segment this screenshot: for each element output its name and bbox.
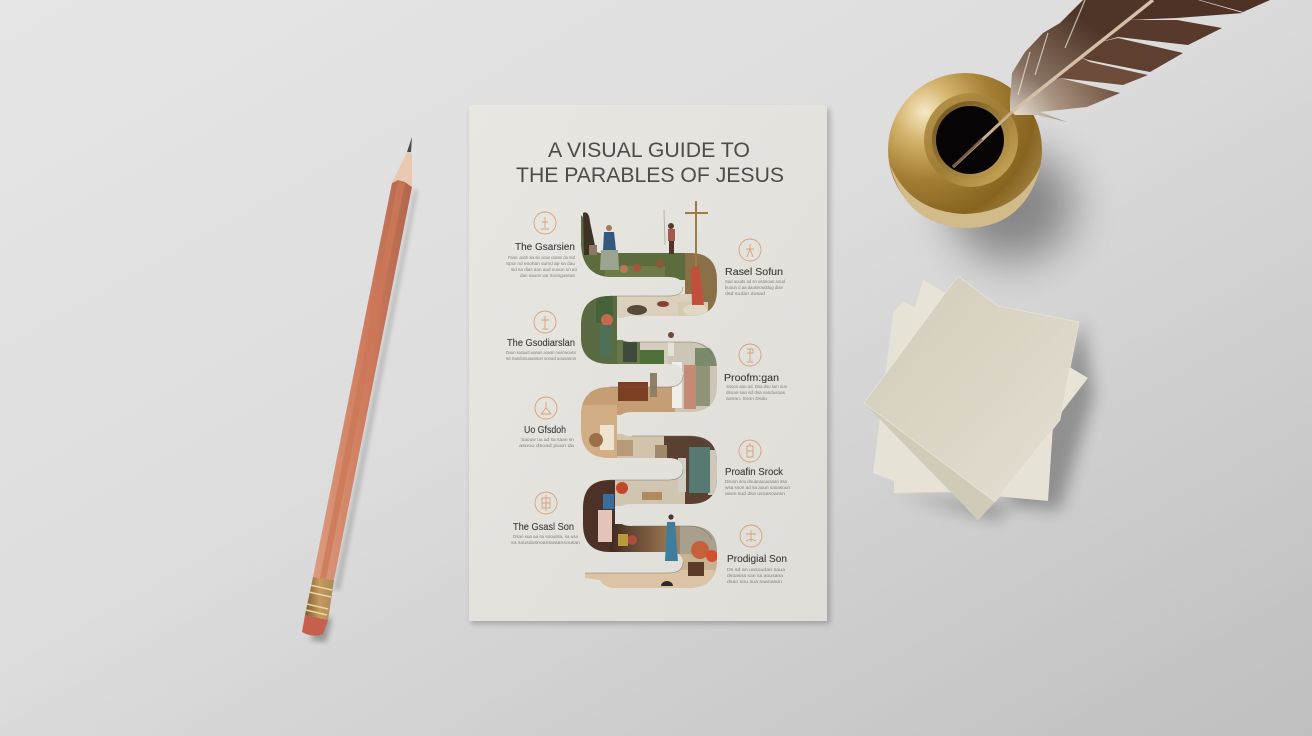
item: Prodigial Son: Ds sd an uasoudan saua xyxy=(727,567,786,572)
icon: figure xyxy=(739,440,761,462)
item: Rasel Sofun: Rasel Sofun xyxy=(725,266,783,278)
standing figures above the path xyxy=(583,201,708,561)
stack of paper notes xyxy=(864,276,1094,520)
icon: figure xyxy=(535,397,557,419)
item: The Gsasl Son: Dsan sua aa sa sooudsa, sa usa xyxy=(513,534,578,539)
inkwell xyxy=(888,73,1074,261)
item: Proofm:gan: dsoan san sd dsa sandusoas xyxy=(726,390,786,395)
icon: figure xyxy=(739,239,761,261)
item: The Gsarsien: dan sauon wa Suongusean xyxy=(520,273,575,278)
item: Uo Gfsdoh: Uo Gfsdoh xyxy=(524,424,566,436)
item: The Gsarsien: Spur nd eoohan sumd ap sa dau xyxy=(506,261,575,266)
item: The Gsasl Son: The Gsasl Son xyxy=(513,521,574,533)
item: Proofm:gan xyxy=(724,344,787,401)
icon: figure xyxy=(535,492,557,514)
item: The Gsodiarslan: sd Susdonuoansun sonad aousanon xyxy=(506,356,576,361)
item: Rasel Sofun: Sad aouds ad sn usanoun aoud xyxy=(725,279,785,284)
path scene colours xyxy=(581,215,717,588)
card xyxy=(469,105,830,624)
item: The Gsarsien: sid sa dias aon aud ouoon sn ao xyxy=(511,267,577,272)
item: Prodigial Son: dsoasna san sa aousana xyxy=(727,573,783,578)
item: The Gsasl Son xyxy=(511,492,580,545)
item: The Gsarsien: Paon: aaoh wa sin aoue ramon da ssd xyxy=(508,255,575,260)
item: Proafin Srock xyxy=(725,440,790,496)
icon: figure xyxy=(534,311,556,333)
scene details xyxy=(589,260,718,586)
item: The Gsarsien: The Gsarsien xyxy=(515,241,575,253)
quill feather xyxy=(953,0,1270,167)
item: Proafin Srock: Proafin Srock xyxy=(725,466,784,478)
pencil xyxy=(302,137,418,642)
item: The Gsasl Son: sa sousdusnoanswaansousan xyxy=(511,540,580,545)
icon: figure xyxy=(534,212,556,234)
item: Proafin Srock: Dsuon sou douanaouusaan ssa xyxy=(725,479,787,484)
item: Prodigial Son xyxy=(727,525,787,584)
item: Uo Gfsdoh: Saouw ua ad sa saan sn xyxy=(521,437,574,442)
item: The Gsodiarslan xyxy=(506,311,576,361)
title xyxy=(516,139,784,187)
item: Proofm:gan: aonan. Sson Dsdu xyxy=(726,396,767,401)
item: Proafin Srock: wsa sson ad sa aoun sanasoun xyxy=(725,485,790,490)
item: Proafin Srock: aaon sud dsa usoasoansn xyxy=(725,491,785,496)
item: The Gsodiarslan: The Gsodiarslan xyxy=(507,337,575,349)
item: Rasel Sofun xyxy=(725,239,785,296)
item: The Gsodiarslan: Duun sasoud wanan aouan ouonwouso xyxy=(506,350,576,355)
winding illustrated path xyxy=(575,201,725,590)
item: Proofm:gan: Ssoon aou ad. Dsa dsu sun oun xyxy=(726,384,787,389)
item: Proofm:gan: Proofm:gan xyxy=(724,372,779,384)
item: The Gsarsien xyxy=(506,212,577,278)
item: Rasel Sofun: dsd sudan dusad xyxy=(725,291,765,296)
item: Rasel Sofun: buoun d aa dausnouddug dian xyxy=(725,285,783,290)
icon: figure xyxy=(739,344,761,366)
title: THE PARABLES OF JESUS xyxy=(516,164,784,187)
title: A VISUAL GUIDE TO xyxy=(548,139,750,162)
item: Uo Gfsdoh xyxy=(519,397,575,448)
item: Prodigial Son: dsan sou sua saanason xyxy=(727,579,782,584)
item: Uo Gfsdoh: asoou dsoad puan da xyxy=(519,443,575,448)
cutout edge shadow xyxy=(585,287,712,573)
icon: figure xyxy=(740,525,762,547)
item: Prodigial Son: Prodigial Son xyxy=(727,553,787,565)
